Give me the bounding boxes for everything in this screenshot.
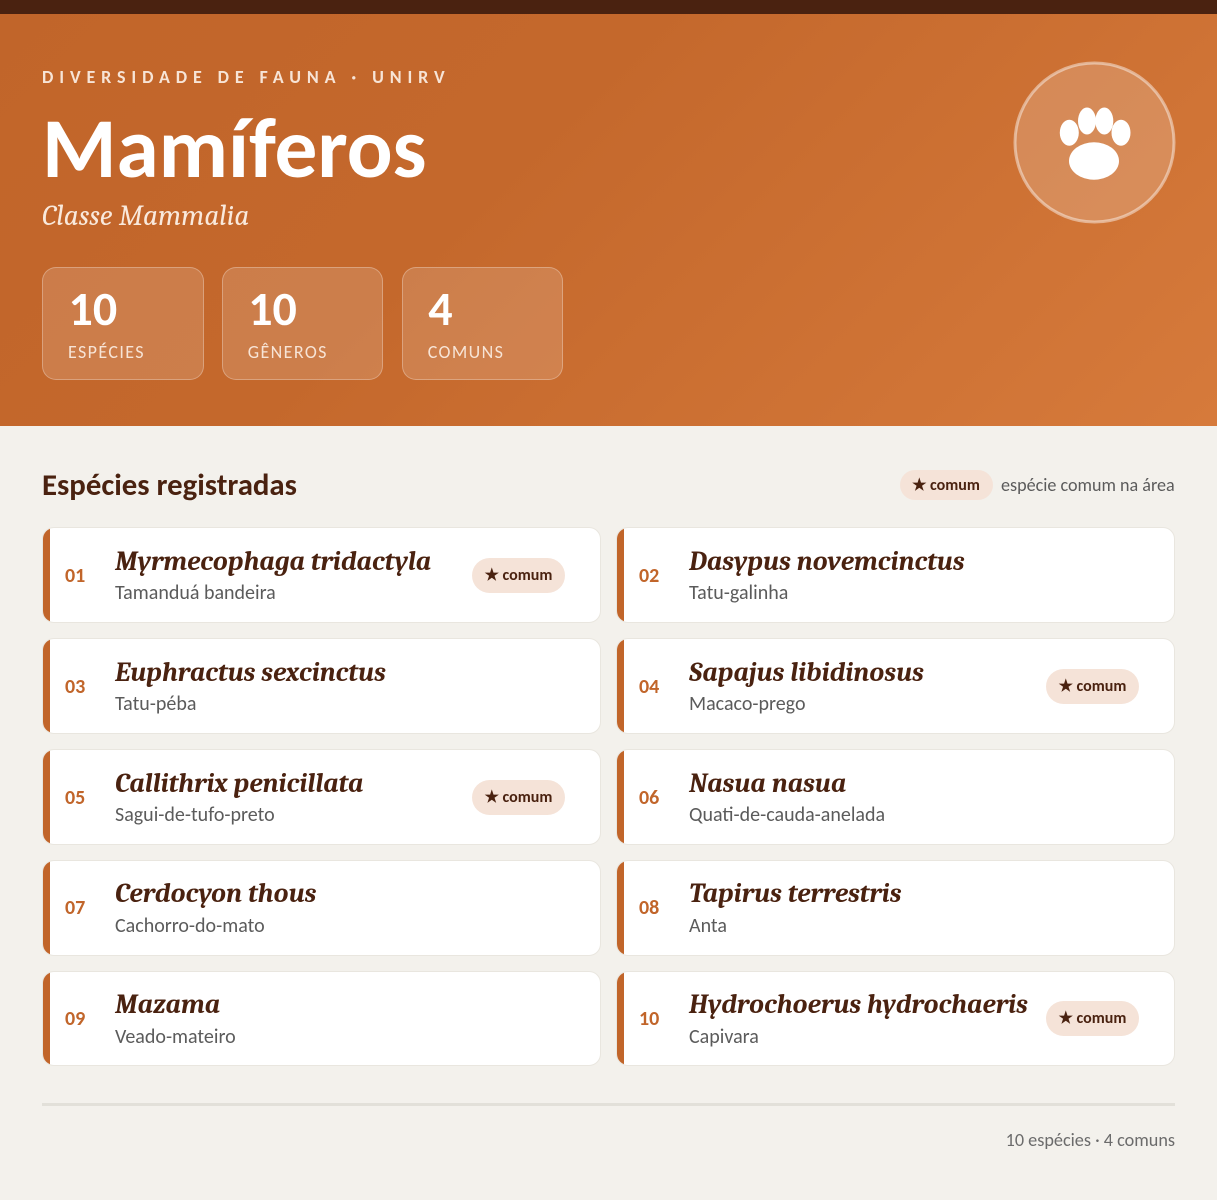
card 07 (42, 860, 601, 956)
card 07: 07 (65, 896, 85, 920)
card 05: Callithrix penicillata (115, 767, 363, 799)
card 04 (616, 638, 1175, 734)
card 08: Anta (689, 914, 727, 938)
card 10 (616, 971, 1175, 1066)
card 08: Tapirus terrestris (689, 877, 901, 909)
stat: comuns: COMUNS (428, 341, 504, 363)
card 01: ★ comum (485, 566, 552, 585)
card 05: Sagui-de-tufo-preto (115, 803, 275, 827)
card 05 (42, 749, 601, 844)
card 10: Capivara (689, 1025, 759, 1049)
card 02: Dasypus novemcinctus (689, 545, 965, 577)
card 08: 08 (639, 896, 659, 920)
card 06 (616, 749, 1175, 844)
stat: espécies (42, 267, 204, 380)
legend pill (900, 470, 992, 500)
card 08 (616, 860, 1175, 956)
legend pill: ★ comum (912, 476, 980, 495)
eyebrow: DIVERSIDADE DE FAUNA · UNIRV (42, 66, 451, 88)
stat: comuns: 4 (428, 279, 453, 338)
card 04: 04 (639, 675, 659, 699)
card 10: 10 (639, 1007, 659, 1031)
card 01: Myrmecophaga tridactyla (115, 545, 431, 577)
card 09: Mazama (115, 988, 220, 1020)
card 03: Euphractus sexcinctus (115, 656, 386, 688)
card 10: Hydrochoerus hydrochaeris (689, 988, 1028, 1020)
card 04: Sapajus libidinosus (689, 656, 924, 688)
card 07: Cerdocyon thous (115, 877, 316, 909)
stat: espécies: 10 (68, 279, 117, 338)
card 09: Veado-mateiro (115, 1025, 236, 1049)
header banner (0, 0, 1217, 426)
card 06: Nasua nasua (689, 767, 846, 799)
stat: espécies: ESPÉCIES (68, 341, 145, 363)
stat: comuns (402, 267, 563, 380)
section heading: Espécies registradas (42, 467, 297, 504)
card 09 (42, 971, 601, 1066)
title: Mamíferos (42, 96, 427, 200)
card 01 (42, 527, 601, 622)
footer text: 10 espécies · 4 comuns (1006, 1129, 1175, 1151)
card 01: 01 (65, 564, 85, 588)
icon: paw in circle (1014, 62, 1176, 224)
card 06: Quati-de-cauda-anelada (689, 803, 885, 827)
stat: gêneros: GÊNEROS (248, 341, 328, 363)
card 02: Tatu-galinha (689, 581, 788, 605)
card 02: 02 (639, 564, 659, 588)
card 03: 03 (65, 675, 85, 699)
card 04: ★ comum (1059, 677, 1126, 696)
stat: gêneros (222, 267, 383, 380)
card 05: 05 (65, 786, 85, 810)
subtitle: Classe Mammalia (42, 200, 249, 233)
card 01: Tamanduá bandeira (115, 581, 276, 605)
card 02 (616, 527, 1175, 622)
card 07: Cachorro-do-mato (115, 914, 265, 938)
card 03 (42, 638, 601, 734)
legend text: espécie comum na área (1001, 474, 1175, 496)
card 03: Tatu-péba (115, 692, 196, 716)
stat: gêneros: 10 (248, 279, 297, 338)
card 06: 06 (639, 786, 659, 810)
card 04: Macaco-prego (689, 692, 806, 716)
card 05: ★ comum (485, 788, 552, 807)
card 09: 09 (65, 1007, 85, 1031)
card 10: ★ comum (1059, 1009, 1126, 1028)
